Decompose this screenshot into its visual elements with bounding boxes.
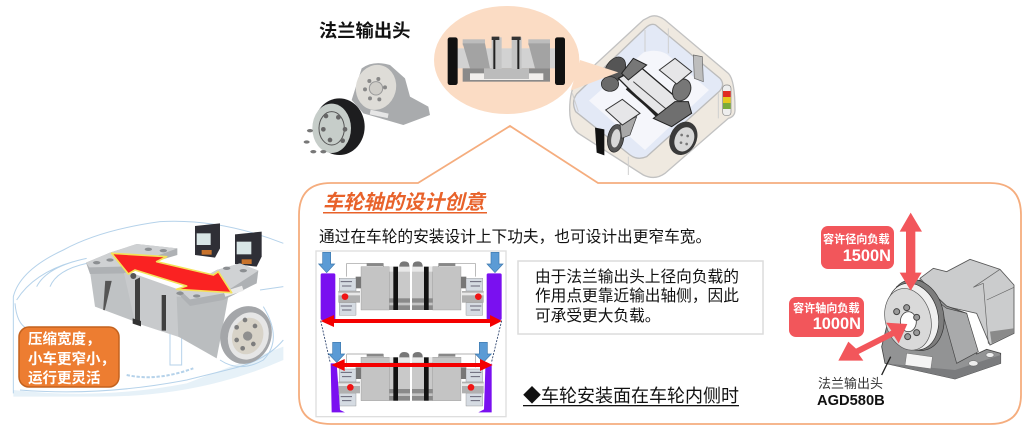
callout: compress width: 压缩宽度，	[28, 330, 100, 348]
housing base	[882, 280, 1001, 379]
callout: allowable radial load	[821, 226, 894, 269]
indicator light	[723, 85, 731, 116]
callout: compress width: 小车更窄小，	[28, 350, 115, 368]
explanation box: 由于法兰输出头上径向负载的	[535, 268, 739, 286]
connecting dashed guides	[321, 321, 502, 362]
robot vehicle cutaway	[570, 16, 735, 177]
callout: allowable axial load: 容许轴向负载	[793, 301, 860, 315]
product label: AGD580B	[817, 393, 885, 409]
chassis	[600, 53, 703, 160]
gearhead body	[86, 244, 280, 371]
left panel: compact width gearhead illustration	[13, 221, 283, 397]
intro text: 通过在车轮的安装设计上下功夫，也可设计出更窄车宽。	[319, 228, 711, 246]
flange disc	[878, 273, 952, 357]
bubble: front view of wheel axle	[434, 6, 618, 114]
panel: wheel axle design ideas	[299, 126, 1021, 424]
product label: 法兰输出头	[818, 376, 883, 391]
heading: flange output: 法兰输出头	[319, 20, 410, 41]
car outline background	[13, 221, 283, 397]
explanation box: 作用点更靠近输出轴侧，因此	[535, 287, 739, 305]
motor	[920, 259, 1014, 345]
illustration: flange output head and wheel	[304, 60, 430, 155]
callout: allowable radial load: 容许径向负载	[823, 232, 890, 246]
callout: allowable axial load: 1000N	[813, 315, 861, 333]
upper: wider layout	[319, 252, 503, 327]
callout: allowable radial load: 1500N	[843, 247, 891, 265]
arrow: radial load	[900, 213, 922, 291]
callout: compress width	[19, 327, 119, 387]
drivers	[195, 223, 262, 267]
callout: compress width: 运行更灵活	[28, 370, 101, 387]
diagram: wheel mounting comparison	[316, 251, 506, 417]
arrow: width compression	[112, 253, 232, 293]
explanation box: 可承受更大负载。	[535, 307, 660, 325]
vehicle cover	[570, 16, 735, 177]
illustration: flange gearhead with load arrows	[838, 213, 1014, 379]
arrow: axial load	[838, 323, 907, 361]
caption: wheel mount surface: ◆车轮安装面在车轮内侧时	[523, 386, 739, 406]
explanation box	[518, 261, 763, 334]
lower: narrower layout	[329, 342, 493, 412]
panel heading: 车轮轴的设计创意	[323, 191, 487, 214]
callout: allowable axial load	[789, 297, 864, 337]
product label	[817, 376, 885, 409]
